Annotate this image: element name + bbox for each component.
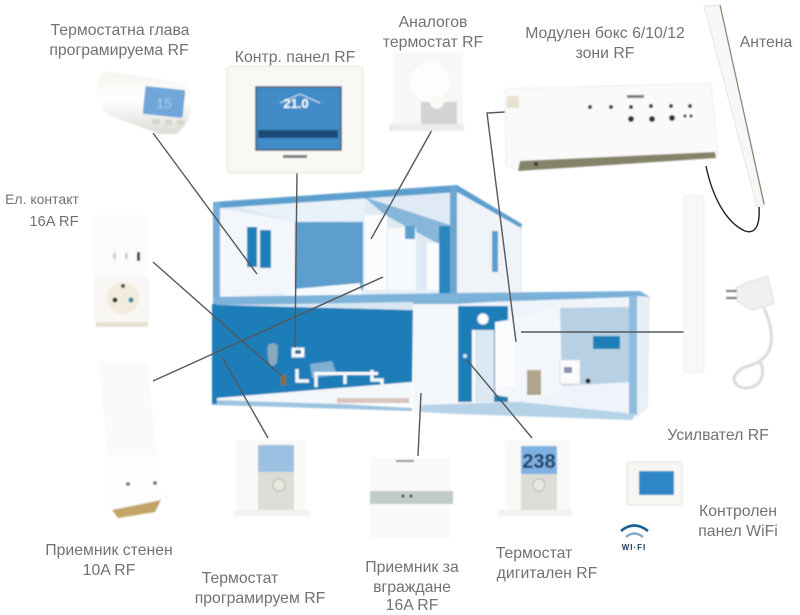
label: programmable thermostat: програмируем RF xyxy=(195,590,326,607)
device: WiFi control panel xyxy=(627,462,682,505)
label: electric contact xyxy=(5,191,79,230)
lower floor left xyxy=(212,302,458,412)
label: antenna: Антена xyxy=(740,34,793,51)
label: in-wall receiver: 16A RF xyxy=(386,597,439,614)
label: thermostatic head xyxy=(49,22,190,59)
label: programmable thermostat: Термостат xyxy=(202,570,278,587)
label: digital thermostat: дигитален RF xyxy=(497,565,598,582)
device: digital thermostat xyxy=(498,440,572,516)
label: electric contact: 16A RF xyxy=(29,214,79,230)
label: electric contact: Ел. контакт xyxy=(5,191,79,207)
device: antenna with cable xyxy=(704,5,765,232)
label: wall receiver xyxy=(45,542,173,579)
label: analog thermostat: Аналогов xyxy=(399,14,467,31)
connector lines xyxy=(153,112,686,456)
label: WiFi panel: Контролен xyxy=(699,503,777,520)
device: wall receiver xyxy=(99,361,161,518)
icon: WiFi xyxy=(621,526,648,552)
label: control panel: Контр. панел RF xyxy=(235,49,356,66)
label: thermostatic head: Термостатна глава xyxy=(51,22,190,39)
device: programmable thermostatic head: 15 xyxy=(156,95,172,111)
device: digital thermostat: 238 xyxy=(522,451,556,473)
device: modular box xyxy=(505,83,718,171)
label: modular box: Модулен бокс 6/10/12 xyxy=(525,25,685,42)
label: thermostatic head: програмируема RF xyxy=(49,42,189,59)
device: programmable thermostat xyxy=(234,440,310,516)
label: wall receiver: Приемник стенен xyxy=(45,542,173,559)
device: analog thermostat xyxy=(389,53,464,131)
floor slab xyxy=(213,291,650,307)
label: analog thermostat: термостат RF xyxy=(383,34,484,51)
icon: WiFi: WI·FI xyxy=(622,543,646,552)
label: digital thermostat xyxy=(496,545,598,582)
device: repeater xyxy=(684,196,704,372)
device: programmable thermostatic head xyxy=(97,72,191,134)
device: RF control panel: 21.0 xyxy=(283,96,309,111)
device: RF control panel xyxy=(227,66,363,173)
label: repeater: Усилвател RF xyxy=(667,427,769,444)
device: in-wall receiver xyxy=(370,457,453,539)
device: power adapter xyxy=(726,276,774,388)
label: WiFi panel: панел WiFi xyxy=(698,523,778,540)
label: wall receiver: 10A RF xyxy=(83,562,136,579)
label: in-wall receiver: Приемник за xyxy=(365,559,459,576)
house cutaway xyxy=(212,185,650,420)
device: electric contact xyxy=(94,215,149,327)
upper floor xyxy=(213,185,522,302)
label: WiFi panel xyxy=(698,503,778,540)
label: modular box: зони RF xyxy=(576,45,635,62)
lower floor right xyxy=(420,292,650,420)
label: programmable thermostat xyxy=(195,570,326,607)
label: in-wall receiver: вграждане xyxy=(373,579,451,596)
label: digital thermostat: Термостат xyxy=(496,545,572,562)
label: analog thermostat xyxy=(383,14,484,51)
label: modular box xyxy=(525,25,685,62)
label: in-wall receiver xyxy=(365,559,459,614)
